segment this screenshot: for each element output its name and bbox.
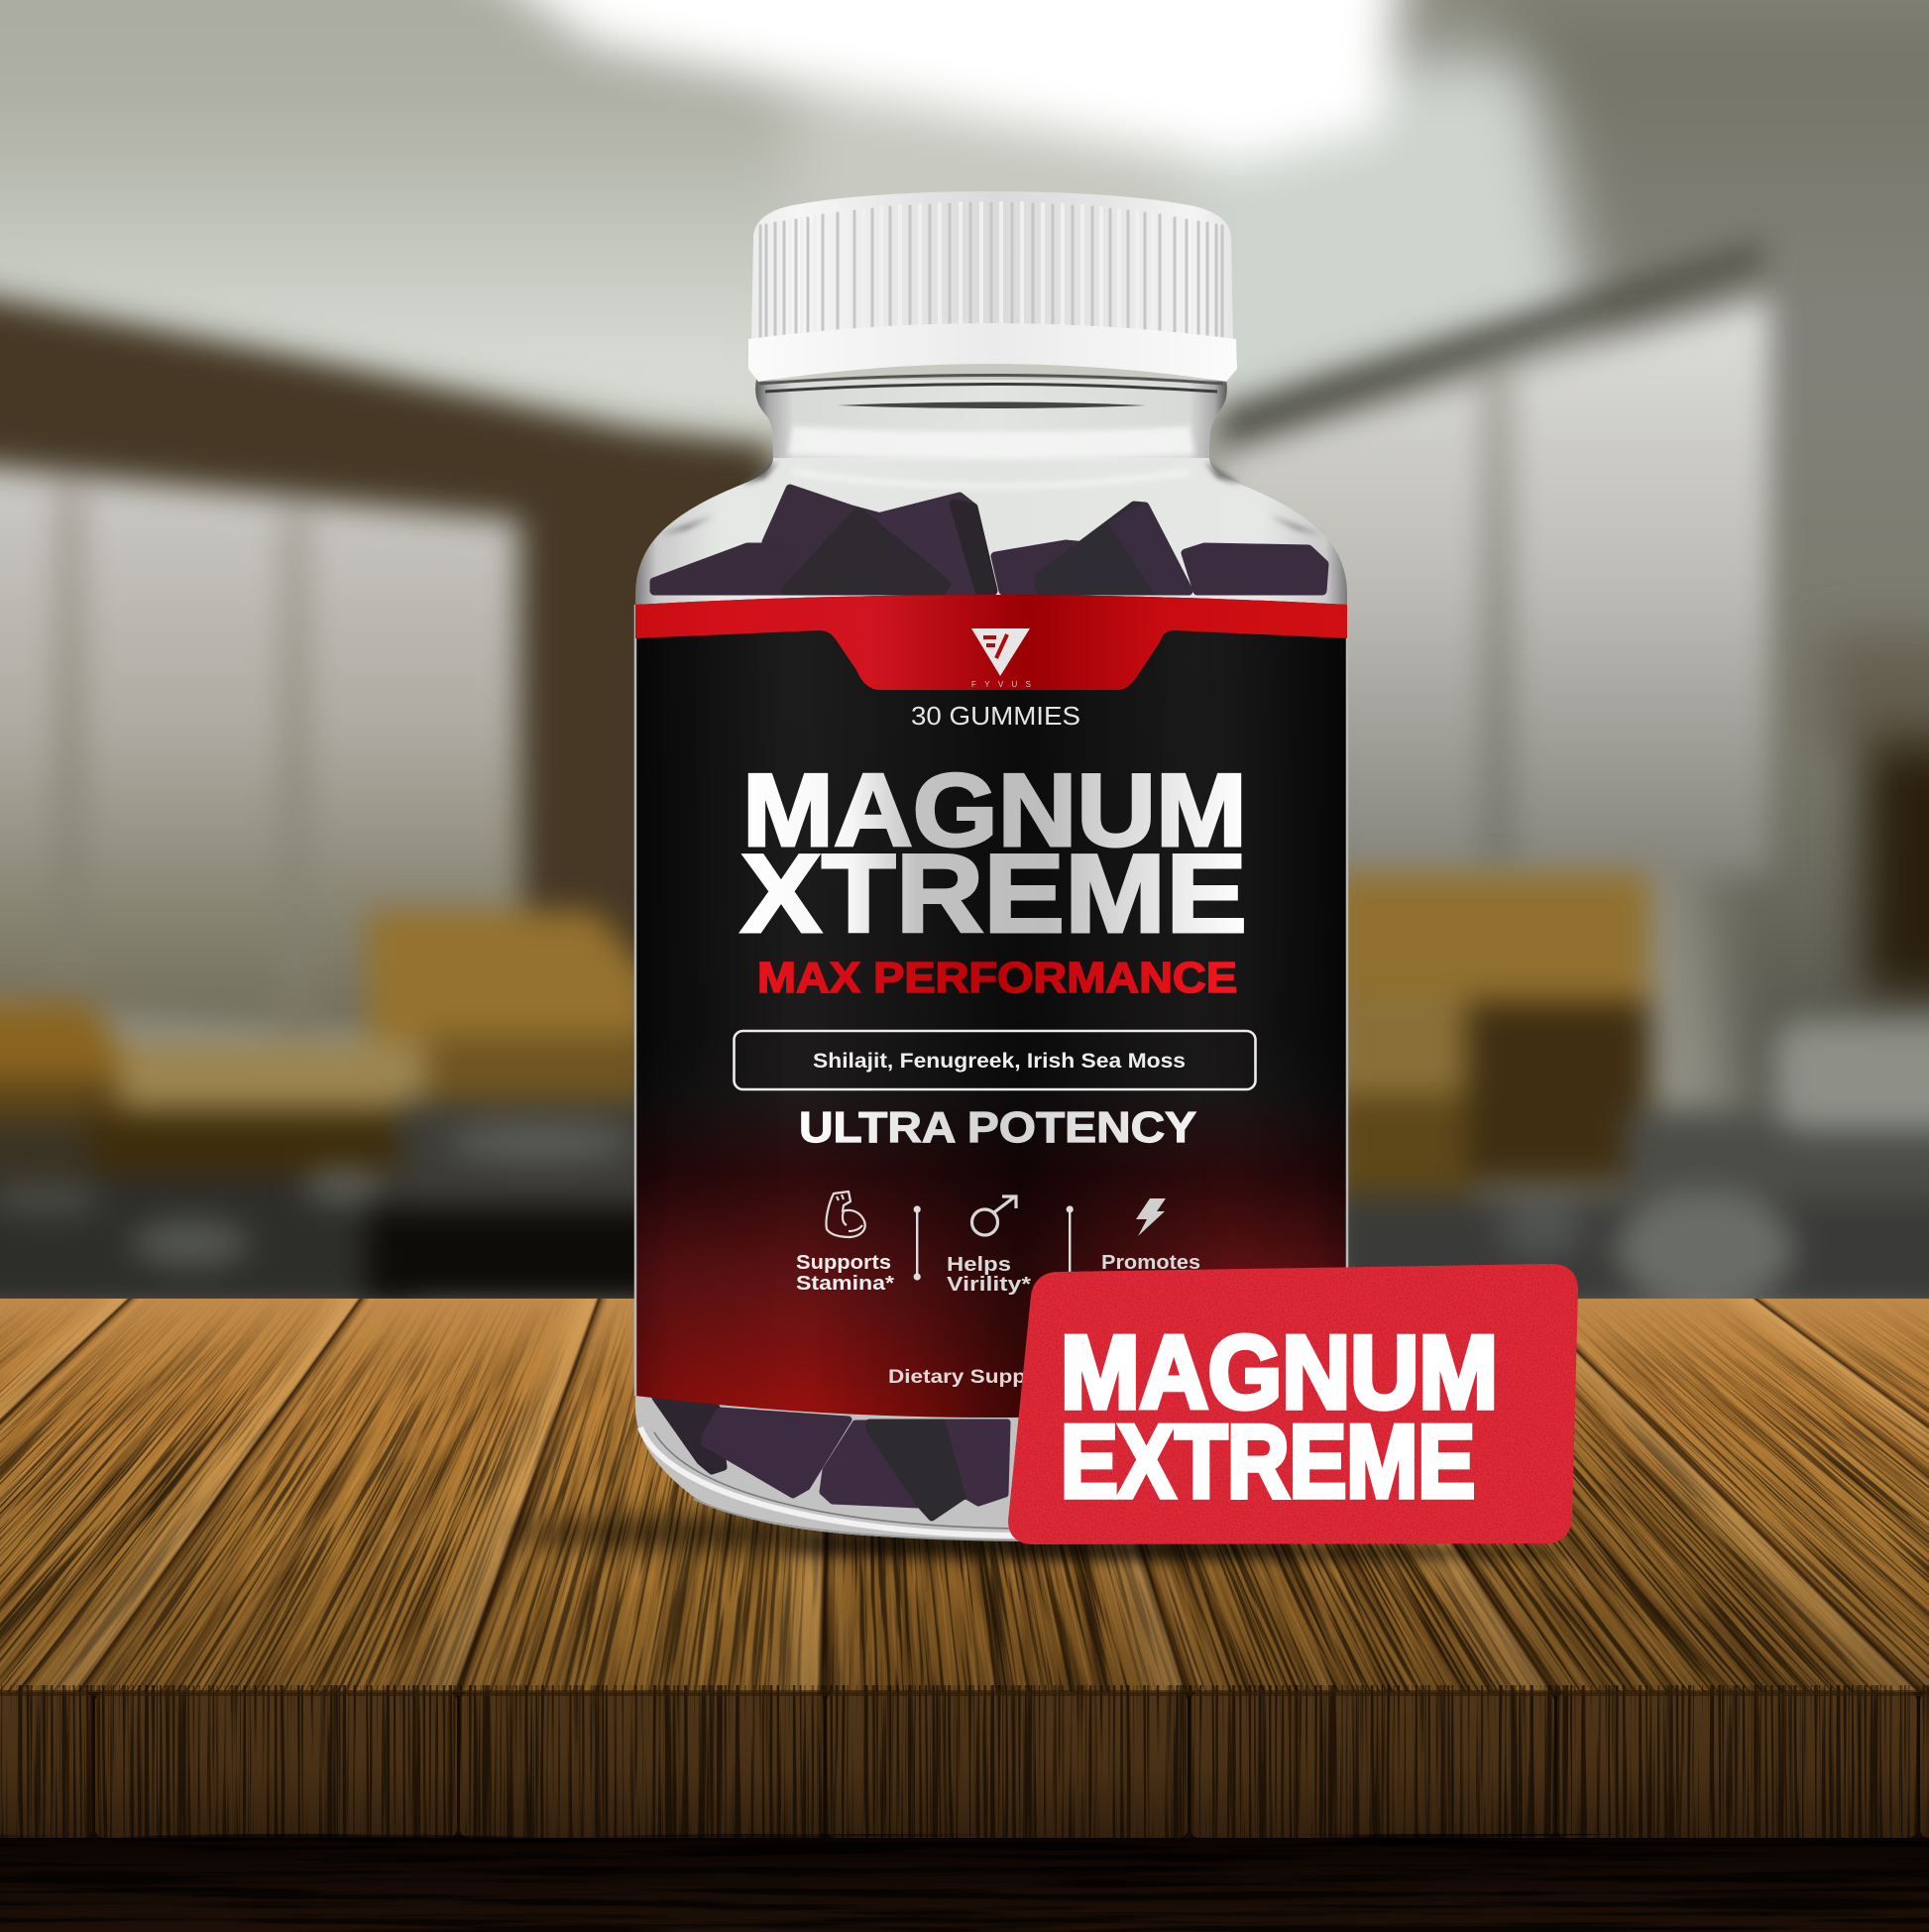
plank tone variation bbox=[76, 1299, 1929, 1695]
ingredients box bbox=[734, 1031, 1255, 1089]
product name: XTREME bbox=[740, 832, 1247, 956]
potency heading: ULTRA POTENCY bbox=[799, 1103, 1196, 1152]
right window bbox=[1219, 297, 1770, 874]
benefit: virility: Virility* bbox=[947, 1274, 1031, 1296]
product name: MAGNUM bbox=[742, 753, 1247, 868]
bottle bbox=[635, 191, 1347, 1540]
right brown object bbox=[1864, 724, 1929, 996]
table front edge bbox=[0, 1690, 1929, 1841]
product name card bbox=[1008, 1264, 1578, 1544]
right beam bbox=[1219, 242, 1762, 452]
left window bbox=[0, 464, 515, 1043]
benefit: promotes bbox=[1101, 1198, 1200, 1274]
glass jar body bbox=[635, 380, 1347, 1539]
icon: lightning bolt bbox=[1136, 1198, 1166, 1236]
count: 30 GUMMIES bbox=[911, 701, 1080, 731]
right floor and cushion bbox=[1328, 1194, 1929, 1313]
glass neck bbox=[659, 375, 1323, 535]
cap band bbox=[748, 323, 1237, 382]
gummies bottom bbox=[655, 1398, 1007, 1518]
product name bbox=[740, 753, 1247, 956]
benefit: virility: Helps bbox=[947, 1254, 1011, 1276]
ceiling glare bbox=[426, 0, 1408, 164]
benefit: stamina: Supports bbox=[796, 1252, 891, 1274]
dietary note: Dietary Supp bbox=[888, 1367, 1026, 1388]
bottle cap bbox=[748, 191, 1237, 382]
gummies top bbox=[654, 489, 1324, 591]
benefit: stamina: Stamina* bbox=[796, 1273, 894, 1295]
card text: MAGNUM bbox=[1061, 1315, 1498, 1430]
red header band bbox=[635, 595, 1347, 690]
benefit: promotes: Promotes bbox=[1101, 1252, 1200, 1274]
ingredients box: Shilajit, Fenugreek, Irish Sea Moss bbox=[813, 1050, 1186, 1073]
left beam bbox=[0, 289, 773, 1229]
card text: EXTREME bbox=[1061, 1405, 1475, 1520]
tagline: MAX PERFORMANCE bbox=[757, 954, 1237, 1002]
benefit: stamina bbox=[796, 1192, 894, 1295]
table top lighting shade bbox=[0, 1546, 1929, 1695]
table underside shadow band bbox=[0, 1838, 1929, 1932]
bottle shadow on table bbox=[506, 1513, 1576, 1561]
divider bbox=[914, 1205, 921, 1281]
label bbox=[635, 595, 1347, 1418]
benefit: virility bbox=[947, 1196, 1031, 1296]
cap ribs bbox=[760, 203, 1222, 342]
divider bbox=[1067, 1205, 1074, 1279]
brand logo bbox=[971, 628, 1031, 689]
card text bbox=[1061, 1315, 1498, 1520]
jar base rings bbox=[640, 1427, 1021, 1540]
floor left bbox=[0, 1175, 416, 1313]
icon: flexed arm bbox=[826, 1192, 865, 1237]
right sofa bbox=[1328, 872, 1650, 1001]
bottom glass bbox=[635, 1393, 1031, 1539]
icon: male symbol bbox=[971, 1196, 1016, 1235]
brand logo: FYVUS bbox=[971, 680, 1031, 689]
left sofa bbox=[367, 910, 654, 1041]
